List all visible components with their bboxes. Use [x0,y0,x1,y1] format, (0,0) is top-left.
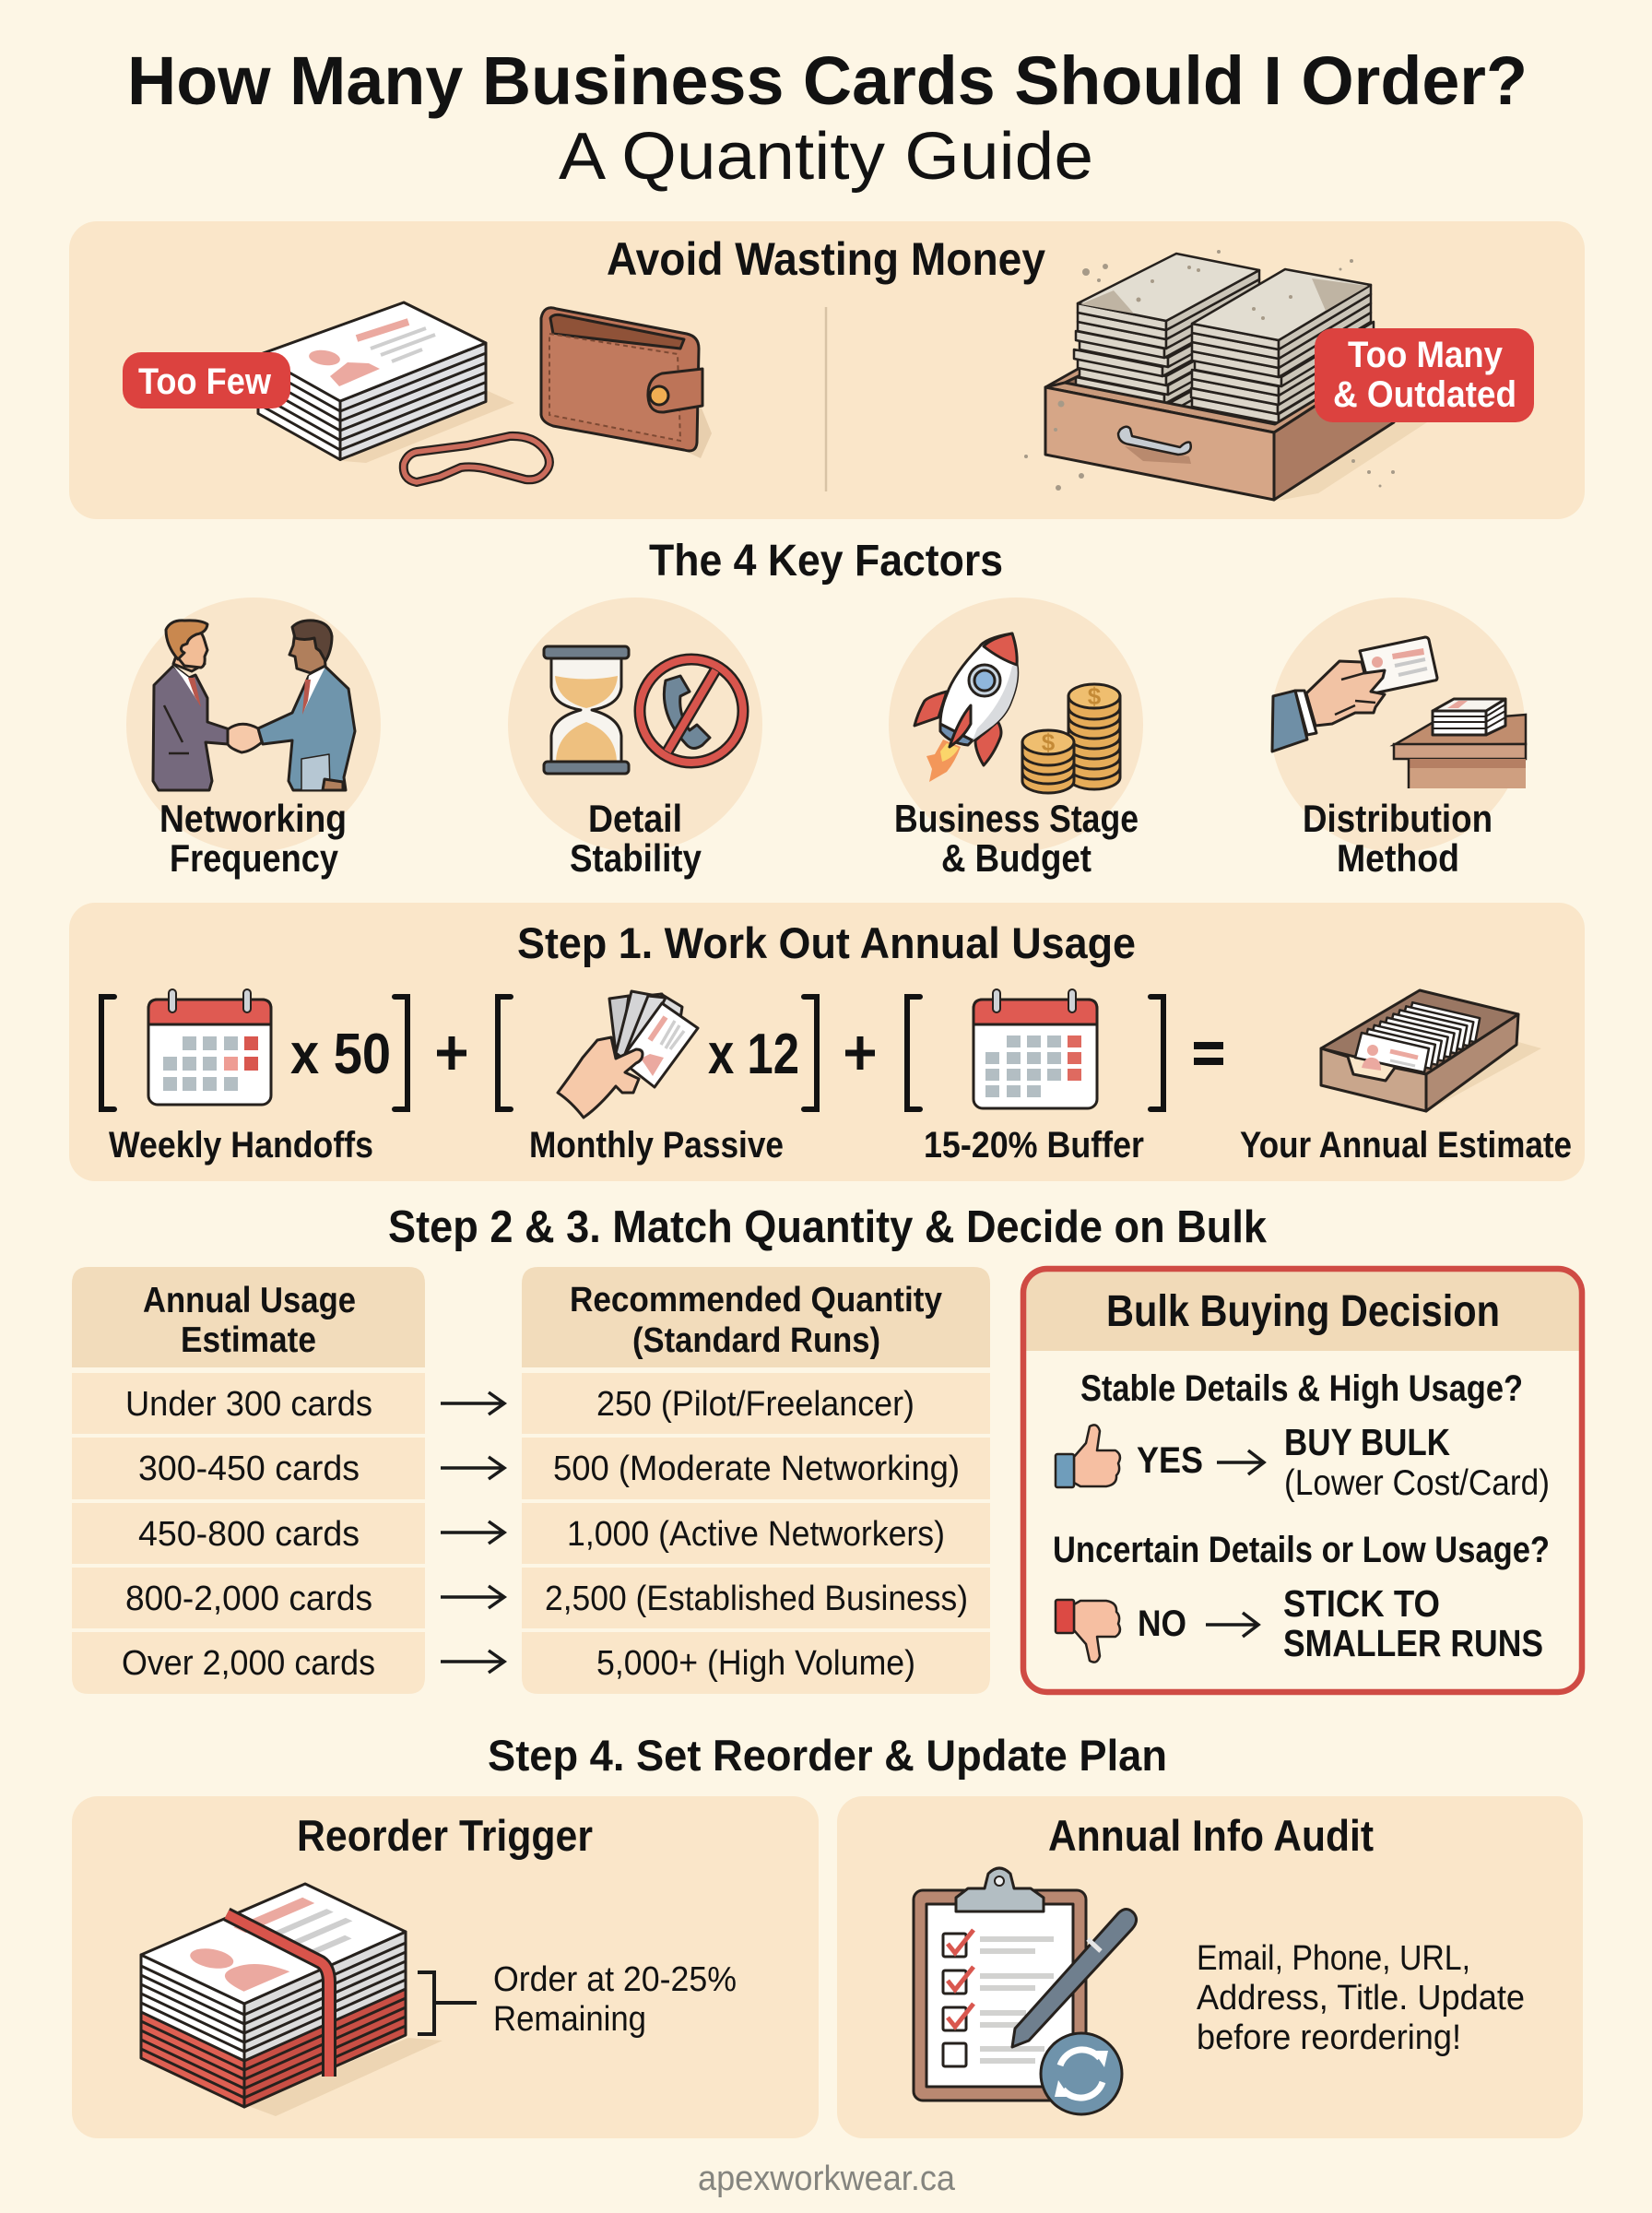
question: stable details: Stable Details & High Usage? [1080,1368,1523,1409]
outcome: buy bulk [1284,1421,1550,1503]
step 1 labels: 15-20% Buffer [924,1125,1144,1166]
audit note: Address, Title. Update [1197,1979,1525,2018]
multiplier x 12: x 12 [708,1023,799,1086]
badge: too many and outdated [1315,328,1534,422]
question: uncertain details: Uncertain Details or Low Usage? [1053,1530,1550,1570]
audit note [1197,1939,1525,2057]
step 1 labels: Weekly Handoffs [109,1125,373,1166]
icon: small card stack [258,302,514,463]
arrows between columns [441,1392,504,1673]
title: How Many Business Cards Should I Order? [127,42,1528,119]
factor: business stage and budget [889,598,1143,880]
equals operator [1194,1046,1223,1061]
label: Method [1337,836,1459,880]
heading: Reorder Trigger [297,1811,593,1860]
label [570,797,702,880]
heading: Annual Info Audit [1048,1811,1374,1860]
icon: banded card stack [141,1884,442,2116]
icon: rocket [914,633,1018,782]
icon: coin stacks: $ [1042,728,1056,756]
heading: step 1: Step 1. Work Out Annual Usage [517,918,1136,967]
table: annual usage estimate: 450-800 cards [138,1515,360,1554]
table: annual usage estimate: Annual Usage [143,1281,356,1320]
arrow [1217,1450,1264,1474]
reorder note [493,1960,737,2039]
icon: clipboard checklist [914,1868,1137,2114]
icon: wallet [541,308,712,458]
label: Networking [159,797,347,840]
factor: networking frequency [126,598,381,880]
label [159,797,347,880]
label: Stability [570,836,702,880]
factor: detail stability [508,598,762,880]
label: Business Stage [894,797,1139,840]
icon: coin stacks [1022,682,1120,793]
footer url: apexworkwear.ca [698,2160,956,2198]
reorder note: Remaining [493,2000,646,2039]
table: annual usage estimate: 300-450 cards [138,1450,360,1488]
panel: step 1 annual usage [69,903,1585,1181]
table: annual usage estimate: Over 2,000 cards [122,1644,375,1683]
badge: too few [123,352,290,408]
table: annual usage estimate: Under 300 cards [125,1385,372,1424]
icon: weekly calendar [148,989,271,1105]
table: recommended quantity [522,1267,990,1694]
table: recommended quantity: Recommended Quantity [570,1281,942,1320]
icon: buffer calendar [974,989,1097,1108]
step 1 labels: Your Annual Estimate [1240,1125,1572,1166]
label: Frequency [170,836,339,880]
badge: too few: Too Few [138,361,272,402]
heading: avoid wasting money: Avoid Wasting Money [607,233,1045,285]
table: recommended quantity: 500 (Moderate Networking) [553,1450,960,1488]
bracket marker [418,1972,477,2034]
panel: bulk buying decision [1023,1269,1582,1692]
badge: too many and outdated: Too Many [1348,335,1504,375]
table: annual usage estimate: 800-2,000 cards [125,1580,372,1618]
icon: coin stacks: $ [1088,682,1102,710]
reorder note: Order at 20-25% [493,1960,737,1999]
label: & Budget [941,836,1092,880]
yes: YES [1137,1440,1203,1481]
factor: distribution method [1270,598,1526,880]
icon: thumbs down [1056,1600,1120,1663]
panel: annual info audit [837,1796,1583,2138]
table: annual usage estimate [72,1267,425,1694]
icon: no phone calls [640,659,743,763]
label [1303,797,1493,880]
table: recommended quantity: 2,500 (Established Business) [545,1580,968,1618]
heading: the 4 key factors: The 4 Key Factors [649,537,1003,586]
arrow [1206,1613,1258,1637]
table: recommended quantity: 5,000+ (High Volume) [596,1644,915,1683]
multiplier x 50: x 50 [290,1023,391,1086]
audit note: Email, Phone, URL, [1197,1939,1470,1978]
subtitle: A Quantity Guide [559,120,1093,194]
table: recommended quantity: 250 (Pilot/Freelancer) [596,1385,914,1424]
icon: rubber band [404,436,549,482]
heading: step 4: Step 4. Set Reorder & Update Plan [488,1731,1167,1780]
icon: card box estimate [1321,990,1541,1111]
panel: reorder trigger [72,1796,819,2138]
no: NO [1138,1604,1186,1644]
divider [825,307,827,491]
badge: too many and outdated: & Outdated [1333,374,1516,415]
outcome: stick to smaller runs: STICK TO [1283,1582,1440,1625]
label: Detail [588,797,682,840]
icon: thumbs up [1056,1425,1120,1487]
table: recommended quantity: (Standard Runs) [632,1321,880,1360]
step 1 labels: Monthly Passive [529,1125,784,1166]
panel: avoid wasting money [69,221,1585,519]
icon: hand giving card over desk [1272,637,1526,788]
step 1 labels [109,1125,1572,1166]
label: Distribution [1303,797,1493,840]
outcome: stick to smaller runs [1283,1582,1543,1664]
table: annual usage estimate: Estimate [181,1320,316,1360]
icon: drawer overflowing with outdated cards [1024,250,1427,501]
outcome: buy bulk: (Lower Cost/Card) [1284,1463,1550,1503]
heading: Bulk Buying Decision [1106,1287,1500,1336]
brackets [101,997,1163,1109]
table: recommended quantity: 1,000 (Active Networkers) [567,1515,945,1554]
icon: hand with cards [558,991,698,1118]
label [894,797,1139,880]
icon: hourglass [544,646,629,774]
outcome: buy bulk: BUY BULK [1284,1421,1450,1463]
plus operator [845,1036,875,1070]
outcome: stick to smaller runs: SMALLER RUNS [1283,1622,1543,1664]
audit note: before reordering! [1197,2018,1461,2057]
plus operator [437,1036,466,1070]
heading: steps 2 and 3: Step 2 & 3. Match Quantity & Decide on Bulk [388,1202,1268,1252]
icon: handshake [153,621,355,790]
